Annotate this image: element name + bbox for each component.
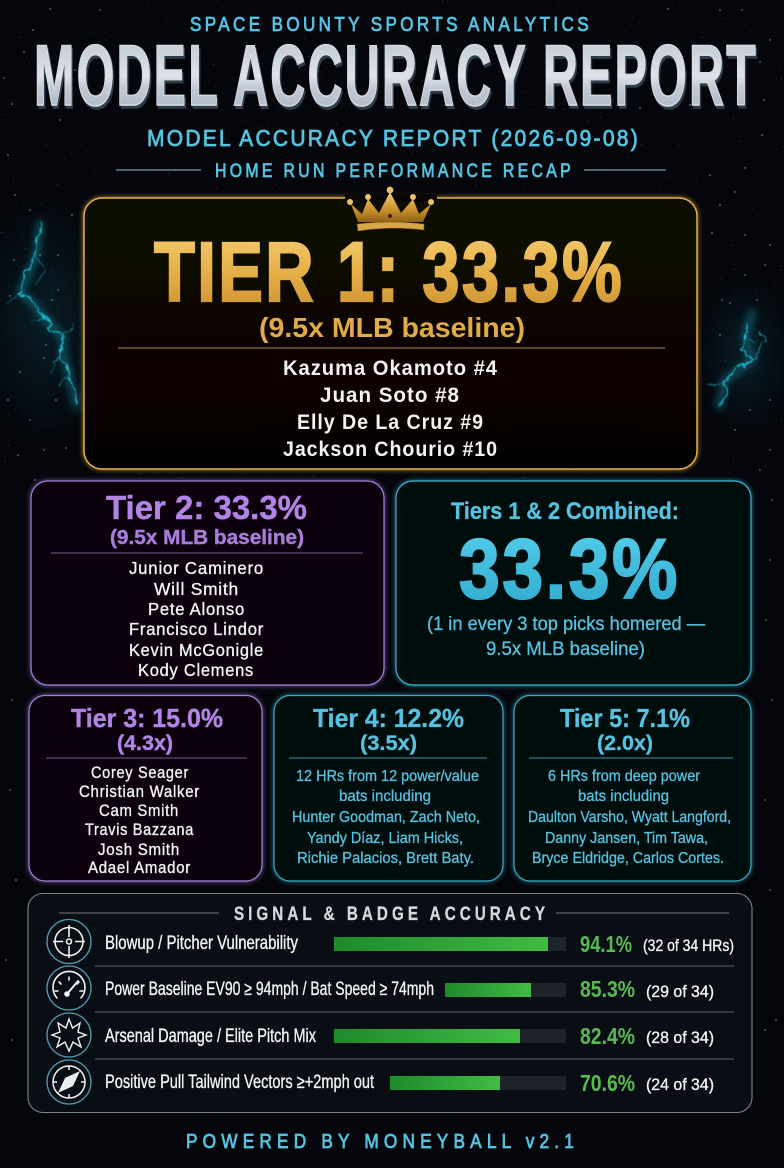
count: (24 of 34) bbox=[646, 1075, 714, 1094]
tier 5 description: Danny Jansen, Tim Tawa, bbox=[545, 830, 708, 847]
tier 3 players: Josh Smith bbox=[98, 841, 180, 859]
tier 4 description: Richie Palacios, Brett Baty. bbox=[297, 850, 474, 867]
panel: tier 5 bbox=[514, 696, 751, 881]
tier 2 players bbox=[129, 558, 264, 680]
value: 85.3% bbox=[580, 976, 635, 1002]
tier 4 description: Hunter Goodman, Zach Neto, bbox=[292, 809, 480, 826]
tier 3 players: Adael Amador bbox=[88, 859, 191, 877]
label: Positive Pull Tailwind Vectors ≥+2mph out bbox=[105, 1072, 375, 1093]
panel: signal and badge accuracy bbox=[28, 894, 752, 1112]
panel: tier 3 bbox=[29, 696, 262, 881]
icon: gauge bbox=[47, 966, 91, 1010]
label: Blowup / Pitcher Vulnerability bbox=[105, 933, 298, 954]
tier 4 multiple: (3.5x) bbox=[360, 732, 417, 755]
value: 82.4% bbox=[580, 1023, 635, 1049]
tier 4 headline: Tier 4: 12.2% bbox=[313, 703, 464, 733]
tier 1 players: Kazuma Okamoto #4 bbox=[283, 357, 498, 380]
panel: tiers 1 and 2 combined bbox=[396, 481, 751, 685]
bar bbox=[445, 983, 566, 997]
tier 4 description: bats including bbox=[339, 788, 431, 805]
combined note bbox=[427, 614, 705, 660]
footer: POWERED BY MONEYBALL v2.1 bbox=[186, 1131, 579, 1153]
label: Power Baseline EV90 ≥ 94mph / Bat Speed ≥ 74mph bbox=[105, 979, 434, 1000]
row: pull tailwind bbox=[47, 1060, 714, 1104]
tier 2 players: Kody Clemens bbox=[138, 660, 254, 680]
tier 2 headline: Tier 2: 33.3% bbox=[106, 489, 307, 526]
tier 4 description: 12 HRs from 12 power/value bbox=[296, 768, 479, 785]
label: Arsenal Damage / Elite Pitch Mix bbox=[105, 1026, 316, 1047]
tier 5 headline: Tier 5: 7.1% bbox=[560, 703, 690, 733]
combined note: 9.5x MLB baseline) bbox=[486, 639, 645, 660]
tier 5 description: 6 HRs from deep power bbox=[548, 768, 700, 785]
icon: crown bbox=[347, 187, 434, 231]
tier 1 baseline multiple: (9.5x MLB baseline) bbox=[259, 312, 525, 343]
tier 4 description: Yandy Díaz, Liam Hicks, bbox=[307, 830, 463, 847]
combined heading: Tiers 1 & 2 Combined: bbox=[451, 498, 679, 525]
tier 5 description: Daulton Varsho, Wyatt Langford, bbox=[528, 809, 731, 826]
bar bbox=[390, 1076, 566, 1090]
panel: tier 2 bbox=[31, 481, 384, 685]
tier 5 description: Bryce Eldridge, Carlos Cortes. bbox=[532, 850, 724, 867]
icon: compass bbox=[47, 1060, 91, 1104]
tier 2 players: Will Smith bbox=[154, 579, 239, 599]
tier 5 description bbox=[528, 768, 731, 867]
tier 3 players bbox=[79, 764, 200, 877]
tier 5 description: bats including bbox=[578, 788, 669, 805]
bar bbox=[334, 937, 566, 951]
tier 2 players: Kevin McGonigle bbox=[129, 640, 264, 660]
tier 3 players: Christian Walker bbox=[79, 783, 200, 801]
tier 1 headline: TIER 1: 33.3% bbox=[154, 225, 624, 319]
count: (29 of 34) bbox=[646, 982, 714, 1001]
tier 1 players: Jackson Chourio #10 bbox=[283, 438, 498, 461]
tier 3 headline: Tier 3: 15.0% bbox=[71, 703, 223, 733]
tier 2 baseline multiple: (9.5x MLB baseline) bbox=[110, 527, 304, 549]
tier 3 multiple: (4.3x) bbox=[117, 732, 173, 755]
row: blowup bbox=[47, 920, 734, 964]
subtitle with rules: HOME RUN PERFORMANCE RECAP bbox=[215, 161, 574, 182]
report date heading: MODEL ACCURACY REPORT (2026-09-08) bbox=[147, 125, 640, 151]
row: arsenal damage bbox=[47, 1013, 714, 1057]
tier 5 multiple: (2.0x) bbox=[597, 732, 653, 755]
count: (28 of 34) bbox=[646, 1028, 714, 1047]
tier 2 players: Pete Alonso bbox=[148, 599, 245, 619]
tier 4 description bbox=[292, 768, 480, 867]
value: 70.6% bbox=[580, 1070, 635, 1096]
signal heading: SIGNAL & BADGE ACCURACY bbox=[234, 904, 549, 925]
tier 3 players: Corey Seager bbox=[91, 764, 189, 782]
tier 3 players: Travis Bazzana bbox=[85, 821, 194, 839]
tier 2 players: Francisco Lindor bbox=[129, 619, 264, 639]
tier 3 players: Cam Smith bbox=[99, 802, 179, 820]
tier 1 players bbox=[283, 357, 498, 461]
row: power baseline bbox=[47, 966, 714, 1010]
tier 2 players: Junior Caminero bbox=[129, 558, 264, 578]
panel: tier 4 bbox=[274, 696, 503, 881]
tier 1 players: Elly De La Cruz #9 bbox=[297, 411, 484, 434]
icon: starburst bbox=[47, 1013, 91, 1057]
eyebrow: brand name: SPACE BOUNTY SPORTS ANALYTICS bbox=[190, 14, 592, 36]
combined note: (1 in every 3 top picks homered — bbox=[427, 614, 705, 635]
panel: tier 1 bbox=[84, 187, 697, 469]
icon: crosshair bbox=[47, 920, 91, 964]
count: (32 of 34 HRs) bbox=[643, 936, 734, 955]
value: 94.1% bbox=[580, 931, 632, 957]
combined value: 33.3% bbox=[459, 522, 680, 616]
tier 1 players: Juan Soto #8 bbox=[320, 384, 460, 407]
bar bbox=[334, 1029, 566, 1043]
